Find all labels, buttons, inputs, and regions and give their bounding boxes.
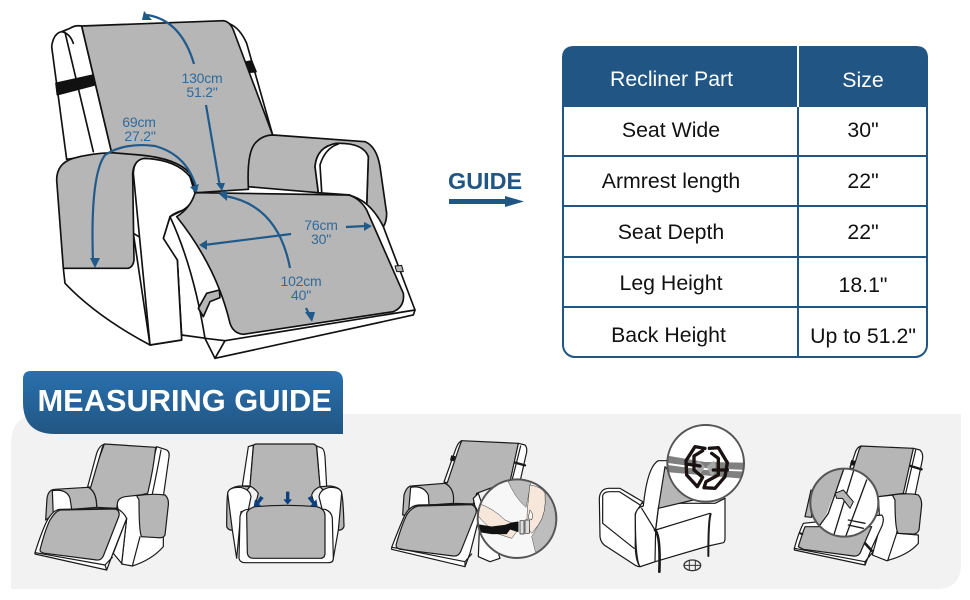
label: back height: 51.2" bbox=[186, 84, 218, 100]
sizes: 22" bbox=[847, 169, 879, 193]
arrow: seat wide right bbox=[346, 226, 366, 227]
arrow: armrest bbox=[92, 145, 197, 262]
sizes: 18.1" bbox=[838, 273, 888, 297]
header labels: Size bbox=[842, 68, 884, 92]
arrow: back height bottom bbox=[206, 105, 220, 187]
grid bbox=[563, 107, 927, 357]
guide arrow bbox=[449, 196, 524, 207]
sizes: 30" bbox=[847, 118, 879, 142]
step 1: recliner front bbox=[35, 444, 169, 570]
guide text: GUIDE bbox=[448, 168, 522, 194]
part names: Back Height bbox=[611, 323, 726, 347]
step 5: under seat strap bbox=[794, 446, 923, 565]
measuring guide panel bbox=[11, 414, 961, 589]
label: seat depth: 40" bbox=[291, 287, 311, 303]
guide arrow label bbox=[448, 168, 524, 207]
step 4: back view with buckle bbox=[599, 425, 747, 572]
label: seat wide: 76cm bbox=[304, 217, 338, 233]
label: seat depth: 102cm bbox=[280, 273, 322, 289]
table body bbox=[563, 47, 927, 357]
main recliner diagram with dimensions bbox=[52, 11, 415, 358]
size table bbox=[562, 46, 928, 357]
label: armrest bbox=[122, 114, 156, 144]
measuring guide banner bbox=[23, 371, 343, 434]
label: seat wide: 30" bbox=[311, 231, 331, 247]
inset circle: strap detail bbox=[809, 468, 880, 538]
sizes: Up to 51.2" bbox=[810, 324, 916, 348]
label: armrest: 27.2" bbox=[124, 128, 156, 144]
label: armrest: 69cm bbox=[122, 114, 156, 130]
table header bbox=[562, 46, 928, 107]
label: back height bbox=[181, 70, 223, 100]
banner title: MEASURING GUIDE bbox=[38, 383, 332, 418]
dimension arrows bbox=[92, 15, 366, 318]
inset circle: buckle bbox=[665, 425, 747, 502]
arrow: seat wide left bbox=[204, 234, 291, 245]
arrow: seat depth bottom bbox=[306, 308, 311, 318]
label: seat wide bbox=[304, 217, 338, 247]
arrow heads bbox=[90, 11, 372, 322]
icon: tuck arrows bbox=[254, 492, 318, 507]
step 2: tuck in, front view bbox=[227, 444, 344, 563]
part names: Armrest length bbox=[602, 169, 740, 193]
part names bbox=[602, 118, 740, 347]
recliner illustration bbox=[52, 21, 415, 358]
inset circle: strap buckle bbox=[477, 478, 558, 558]
arrow: back height top bbox=[147, 15, 194, 64]
arrow: seat depth bbox=[225, 196, 290, 268]
part names: Leg Height bbox=[619, 271, 723, 295]
sizes: 22" bbox=[847, 220, 879, 244]
header labels: Recliner Part bbox=[610, 67, 733, 91]
header labels bbox=[610, 67, 884, 92]
part names: Seat Depth bbox=[618, 220, 724, 244]
label: seat depth bbox=[280, 273, 322, 303]
part names: Seat Wide bbox=[622, 118, 720, 142]
step 3: fasten strap bbox=[392, 441, 558, 567]
sizes bbox=[810, 118, 916, 348]
label: back height: 130cm bbox=[181, 70, 223, 86]
icon: small buckle bbox=[684, 560, 701, 571]
